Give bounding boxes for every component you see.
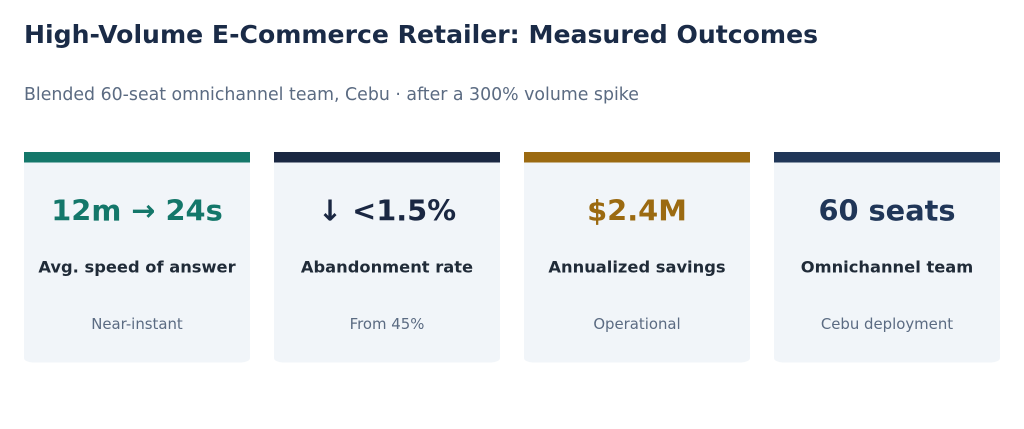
panel: omnichannel team: 60 seats [818,194,956,228]
panel: annualized savings: Operational [593,315,681,333]
panel: abandonment rate: From 45% [350,315,424,333]
panel: omnichannel team: Cebu deployment [821,315,953,333]
panel: average speed of answer [24,152,250,362]
panel: omnichannel team: Omnichannel team [801,258,973,277]
panel: abandonment rate: ↓ <1.5% [318,194,456,228]
panel: annualized savings: Annualized savings [548,258,726,277]
panel: annualized savings [524,152,750,362]
panel: annualized savings: $2.4M [587,194,687,228]
panel: omnichannel team [774,152,1000,362]
subtitle: Blended 60-seat omnichannel team, Cebu · after a 300% volume spike [24,85,639,105]
panel: abandonment rate: Abandonment rate [301,258,473,277]
title: High-Volume E-Commerce Retailer: Measured Outcomes [24,20,818,49]
panel: average speed of answer: 12m → 24s [51,194,223,228]
panel: abandonment rate [274,152,500,362]
panel: average speed of answer: Avg. speed of answer [38,258,236,277]
panel: average speed of answer: Near-instant [91,315,183,333]
